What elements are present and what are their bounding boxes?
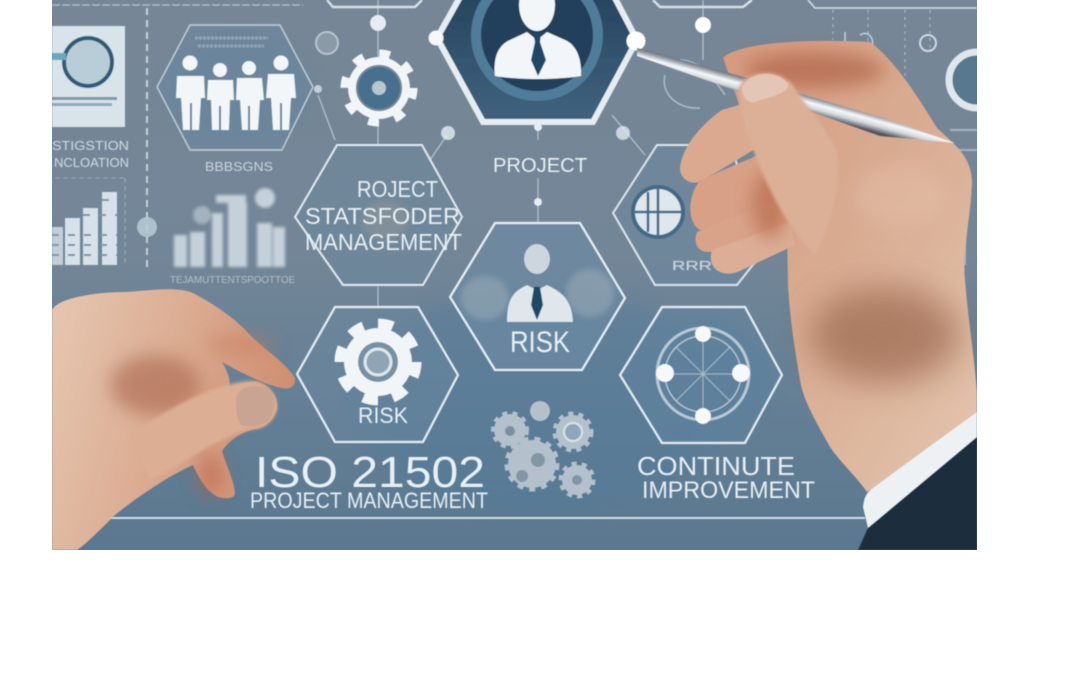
thumbnail <box>236 386 274 426</box>
title: ISO 21502: ISO 21502 <box>255 448 485 497</box>
icon: four people <box>176 56 296 130</box>
icon: person <box>507 244 573 322</box>
blue glow behind diagram <box>426 305 657 440</box>
finger one <box>680 104 754 184</box>
hexagon: risk gear <box>297 307 458 442</box>
hexagon: central person <box>428 0 646 122</box>
hexagon: right partly hidden: RRR <box>672 258 712 273</box>
panel: image background <box>52 0 977 550</box>
icon: network wheel <box>656 326 750 424</box>
hexagon: team <box>157 25 313 150</box>
hand shading <box>110 335 275 497</box>
bar chart: left <box>52 178 125 265</box>
frame lines and dashed connectors <box>52 0 977 518</box>
finger four <box>711 222 795 274</box>
hexagon: right partly hidden <box>613 145 767 285</box>
text: stakeholder label: STATSFODER <box>305 203 460 229</box>
caption: team: BBBSGNS <box>205 159 273 174</box>
pen <box>637 48 955 143</box>
text: continual improvement: CONTINUTE <box>637 451 795 481</box>
text: stakeholder label <box>306 180 462 251</box>
hexagon: central risk <box>450 223 625 370</box>
finger three <box>695 201 784 253</box>
text: risk left: RISK <box>358 403 408 428</box>
text: project: PROJECT <box>493 155 587 177</box>
hexagon: stakeholder management <box>295 145 462 285</box>
caption: under chart: TEJAMUTTENTSPOOTTOE <box>170 275 295 286</box>
finger two <box>690 156 774 230</box>
hand shading <box>745 52 960 383</box>
title: ISO 21502: PROJECT MANAGEMENT <box>250 488 488 513</box>
card: magnifier <box>52 26 125 127</box>
icon: business person <box>495 0 581 79</box>
hexagon: network <box>620 307 782 443</box>
thumb <box>738 73 838 255</box>
text: stakeholder label: MANAGEMENT <box>305 229 462 255</box>
shirt cuff <box>863 412 977 528</box>
left hand <box>52 289 295 550</box>
suit sleeve <box>858 437 977 550</box>
thumb <box>152 379 280 469</box>
bar chart: middle <box>174 188 285 267</box>
right hand <box>637 41 977 492</box>
caption: left card: NCLOATION <box>54 155 129 170</box>
text: continual improvement <box>638 456 816 499</box>
right edge ornaments <box>664 32 1005 265</box>
panel: diagram contents <box>52 0 1005 550</box>
text: continual improvement: IMPROVEMENT <box>642 477 815 504</box>
text: stakeholder label: ROJECT <box>357 176 438 202</box>
icon: gear top <box>345 54 413 122</box>
caption: left card <box>52 140 128 168</box>
connector dots <box>137 15 936 237</box>
text: risk center: RISK <box>510 326 570 359</box>
icon: gear white <box>340 324 416 400</box>
thumbnail right <box>742 74 788 102</box>
infographic illustration <box>52 0 977 550</box>
title: ISO 21502 <box>250 456 488 509</box>
icon: gear cluster <box>494 401 593 496</box>
caption: left card: STIGSTION <box>52 138 129 153</box>
